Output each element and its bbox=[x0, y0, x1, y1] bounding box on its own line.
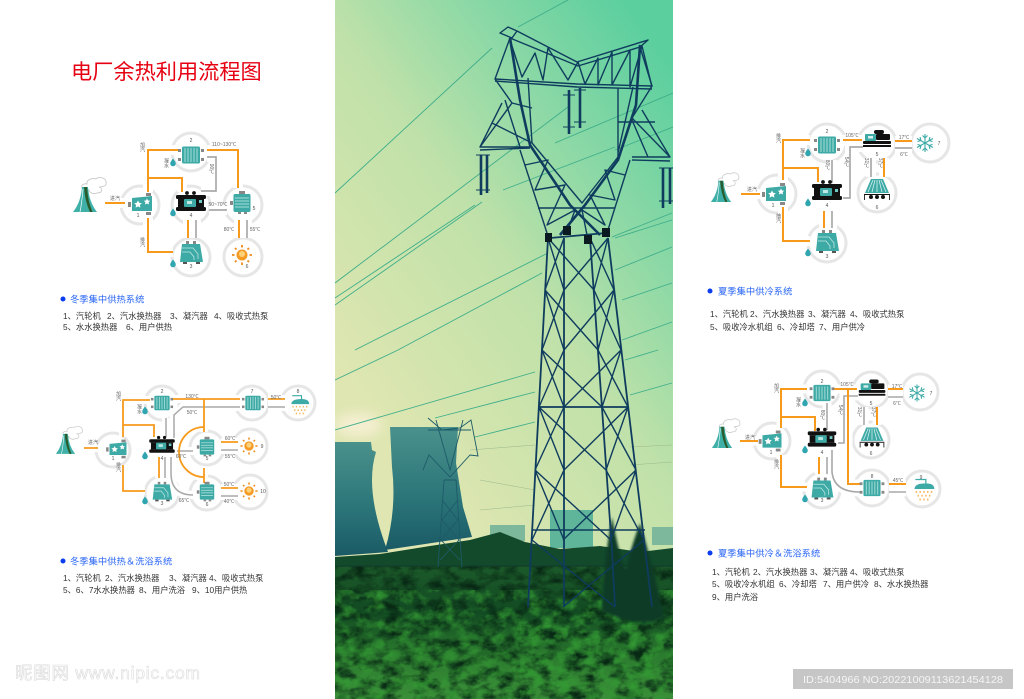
legend: winter heating and bathing: 8、用户洗浴 bbox=[139, 585, 186, 595]
labels bbox=[110, 138, 260, 270]
legend: summer cooling: 5、吸收冷水机组 bbox=[710, 322, 773, 332]
labels: 50~70℃ bbox=[208, 202, 228, 208]
labels: 4 bbox=[161, 456, 164, 462]
labels: 37℃ bbox=[877, 158, 883, 169]
labels: 2 bbox=[826, 129, 829, 135]
diagram: summer central cooling bbox=[711, 124, 949, 262]
labels: 54℃ bbox=[843, 157, 849, 168]
equipment icons bbox=[712, 380, 934, 502]
legend: winter heating: 3、凝汽器 bbox=[170, 311, 209, 321]
pale glow behind cooling towers bbox=[334, 413, 382, 437]
labels: 排汽 bbox=[115, 461, 121, 472]
legend: winter heating and bathing: 5、6、7水水换热器 bbox=[63, 585, 136, 595]
legend: summer cooling: 3、凝汽器 bbox=[808, 309, 847, 319]
labels: 进汽 bbox=[88, 439, 98, 446]
labels: 5 bbox=[253, 206, 256, 212]
labels: 7 bbox=[930, 391, 933, 397]
legend: winter heating: 5、水水换热器 bbox=[63, 322, 118, 332]
legend: winter heating and bathing: 3、凝汽器 bbox=[169, 573, 208, 583]
legend: winter heating bbox=[60, 294, 268, 332]
labels: 80℃ bbox=[819, 410, 825, 421]
leg bracing bbox=[532, 238, 645, 607]
labels: 6 bbox=[246, 264, 249, 270]
labels: 加汽 bbox=[115, 390, 121, 401]
labels: 6℃ bbox=[900, 152, 908, 158]
labels: 凝水 bbox=[795, 396, 801, 407]
legend: winter heating: 1、汽轮机 bbox=[63, 311, 102, 321]
legend: summer cooling and bathing: 夏季集中供冷＆洗浴系统 bbox=[718, 548, 820, 558]
vegetation foreground bbox=[335, 566, 673, 699]
labels: 5 bbox=[870, 401, 873, 407]
legend: summer cooling and bathing: 2、汽水换热器 bbox=[753, 567, 808, 577]
rings bbox=[121, 133, 262, 276]
labels: 2 bbox=[190, 138, 193, 144]
legend: winter heating: 4、吸收式热泵 bbox=[214, 311, 268, 321]
legend: summer cooling: 6、冷却塔 bbox=[777, 322, 816, 332]
labels: 2 bbox=[821, 379, 824, 385]
legend: summer cooling: 夏季集中供冷系统 bbox=[718, 286, 792, 296]
upper cross arm truss bbox=[495, 27, 652, 89]
cooling tower left bbox=[335, 442, 388, 556]
labels: 3 bbox=[821, 498, 824, 504]
labels: 排汽 bbox=[773, 458, 779, 469]
legend: summer cooling and bathing: 9、用户洗浴 bbox=[712, 592, 759, 602]
labels: 3 bbox=[161, 501, 164, 507]
legend: summer cooling: 7、用户供冷 bbox=[819, 322, 865, 332]
labels: 4 bbox=[826, 203, 829, 209]
legend: summer cooling and bathing: 8、水水换热器 bbox=[874, 579, 929, 589]
title: 电厂余热利用流程图 bbox=[71, 60, 262, 84]
image id bar bbox=[793, 669, 1013, 689]
main diagonals bbox=[510, 38, 640, 235]
diagram: winter central heating bbox=[73, 133, 262, 276]
labels: 60℃ bbox=[176, 454, 186, 460]
grass overlay at tower foot bbox=[520, 625, 673, 699]
labels: 80℃ bbox=[824, 160, 830, 171]
equipment icons bbox=[73, 146, 252, 267]
labels: 凝水 bbox=[136, 403, 142, 414]
legend: summer cooling and bathing: 5、吸收冷水机组 bbox=[712, 579, 775, 589]
legend: summer cooling: 4、吸收式热泵 bbox=[850, 309, 904, 319]
labels bbox=[747, 129, 941, 260]
labels: 40℃ bbox=[224, 499, 234, 505]
labels: 10 bbox=[260, 489, 266, 495]
labels: 37℃ bbox=[870, 407, 876, 418]
pipes bbox=[740, 389, 906, 492]
sky background bbox=[335, 0, 673, 570]
labels: 6 bbox=[876, 205, 879, 211]
labels: 80℃ bbox=[224, 227, 234, 233]
legend: winter heating and bathing bbox=[60, 556, 263, 595]
labels: 90℃ bbox=[208, 164, 214, 175]
legend: winter heating: 2、汽水换热器 bbox=[107, 311, 162, 321]
labels: 4 bbox=[821, 450, 824, 456]
labels: 3 bbox=[190, 264, 193, 270]
diagram: winter heating and bathing bbox=[56, 386, 315, 510]
left arm lattice bbox=[480, 38, 532, 150]
labels: 110~130℃ bbox=[212, 142, 236, 148]
tree line bbox=[335, 532, 673, 566]
labels: 9 bbox=[261, 444, 264, 450]
labels: 1 bbox=[770, 450, 773, 456]
legend: summer cooling and bathing: 1、汽轮机 bbox=[712, 567, 751, 577]
legend: winter heating: 6、用户供热 bbox=[126, 322, 173, 332]
labels: 凝水 bbox=[799, 147, 805, 158]
labels: 60℃ bbox=[225, 436, 235, 442]
labels: 进汽 bbox=[110, 195, 120, 202]
diagram: summer cooling and bathing bbox=[712, 371, 940, 508]
labels: 加汽 bbox=[773, 382, 779, 393]
labels: 130℃ bbox=[185, 394, 199, 400]
labels: 45℃ bbox=[893, 478, 903, 484]
labels: 105℃ bbox=[845, 133, 859, 139]
legend: summer cooling: 2、汽水换热器 bbox=[750, 309, 805, 319]
labels bbox=[88, 389, 300, 508]
pipes bbox=[84, 399, 285, 496]
right arm lattice bbox=[618, 47, 670, 161]
labels: 50℃ bbox=[224, 482, 234, 488]
labels: 1 bbox=[137, 213, 140, 219]
photo: transmission tower and cooling towers bbox=[334, 0, 674, 699]
labels: 7 bbox=[251, 389, 254, 395]
labels: 凝水 bbox=[163, 157, 169, 168]
legend: summer cooling bbox=[708, 286, 904, 332]
labels: 31℃ bbox=[856, 407, 862, 418]
legend: summer cooling and bathing: 4、吸收式热泵 bbox=[850, 567, 904, 577]
labels: 3 bbox=[826, 254, 829, 260]
rings bbox=[754, 371, 940, 508]
legend: winter heating and bathing: 1、汽轮机 bbox=[63, 573, 102, 583]
labels: 加汽 bbox=[139, 141, 145, 152]
labels: 50℃ bbox=[271, 395, 281, 401]
insulators bbox=[481, 88, 670, 208]
labels: 2 bbox=[161, 389, 164, 395]
labels: 6 bbox=[206, 502, 209, 508]
labels: 55℃ bbox=[250, 227, 260, 233]
labels: 9 bbox=[920, 475, 923, 481]
labels: 54℃ bbox=[837, 405, 843, 416]
pipes bbox=[741, 140, 912, 241]
labels: 4 bbox=[190, 213, 193, 219]
labels bbox=[745, 379, 933, 504]
labels: 排汽 bbox=[775, 132, 781, 143]
heart waist lattice bbox=[520, 143, 630, 240]
pipes bbox=[105, 150, 247, 252]
watermark: 昵图网 www.nipic.com bbox=[15, 663, 200, 683]
equipment icons bbox=[56, 396, 309, 504]
labels: 50℃ bbox=[187, 410, 197, 416]
labels: 31℃ bbox=[863, 158, 869, 169]
labels: 6℃ bbox=[893, 401, 901, 407]
legend: summer cooling and bathing: 6、冷却塔 bbox=[779, 579, 818, 589]
power lines bbox=[335, 0, 673, 510]
cooling tower centre bbox=[385, 427, 472, 550]
rings bbox=[758, 124, 949, 262]
distant buildings bbox=[490, 510, 673, 548]
legend: winter heating and bathing: 4、吸收式热泵 bbox=[209, 573, 263, 583]
image id bar: ID:5404966 NO:20221009113621454128 bbox=[803, 675, 1003, 686]
labels: 65℃ bbox=[179, 498, 189, 504]
labels: 1 bbox=[772, 203, 775, 209]
legend: winter heating: 冬季集中供热系统 bbox=[70, 294, 144, 304]
labels: 17℃ bbox=[899, 135, 909, 141]
labels: 17℃ bbox=[892, 384, 902, 390]
labels: 5 bbox=[876, 152, 879, 158]
labels: 6 bbox=[870, 451, 873, 457]
labels: 7 bbox=[938, 141, 941, 147]
legend: winter heating and bathing: 冬季集中供热＆洗浴系统 bbox=[70, 556, 172, 566]
trees right of tower bbox=[602, 517, 664, 622]
labels: 进汽 bbox=[747, 186, 757, 193]
labels: 进汽 bbox=[745, 434, 755, 441]
rings bbox=[96, 386, 315, 510]
labels: 1 bbox=[112, 456, 115, 462]
legend: summer cooling: 1、汽轮机 bbox=[710, 309, 749, 319]
legend: summer cooling and bathing: 7、用户供冷 bbox=[823, 579, 869, 589]
labels: 排汽 bbox=[139, 236, 145, 247]
waist gusset plates bbox=[545, 226, 610, 244]
equipment icons bbox=[711, 130, 933, 256]
labels: 8 bbox=[297, 389, 300, 395]
labels: 8 bbox=[871, 474, 874, 480]
labels: 抽汽 bbox=[775, 212, 781, 223]
legend: winter heating and bathing: 9、10用户供热 bbox=[192, 585, 248, 595]
legend: summer cooling and bathing bbox=[708, 548, 929, 602]
tower legs bbox=[528, 233, 652, 607]
labels: 5 bbox=[206, 456, 209, 462]
legend: summer cooling and bathing: 3、凝汽器 bbox=[810, 567, 849, 577]
small background pylon bbox=[423, 418, 478, 567]
legend: winter heating and bathing: 2、汽水换热器 bbox=[105, 573, 160, 583]
fence line bbox=[335, 566, 673, 567]
labels: 105℃ bbox=[840, 382, 854, 388]
main transmission tower bbox=[476, 27, 674, 607]
labels: 55℃ bbox=[225, 454, 235, 460]
